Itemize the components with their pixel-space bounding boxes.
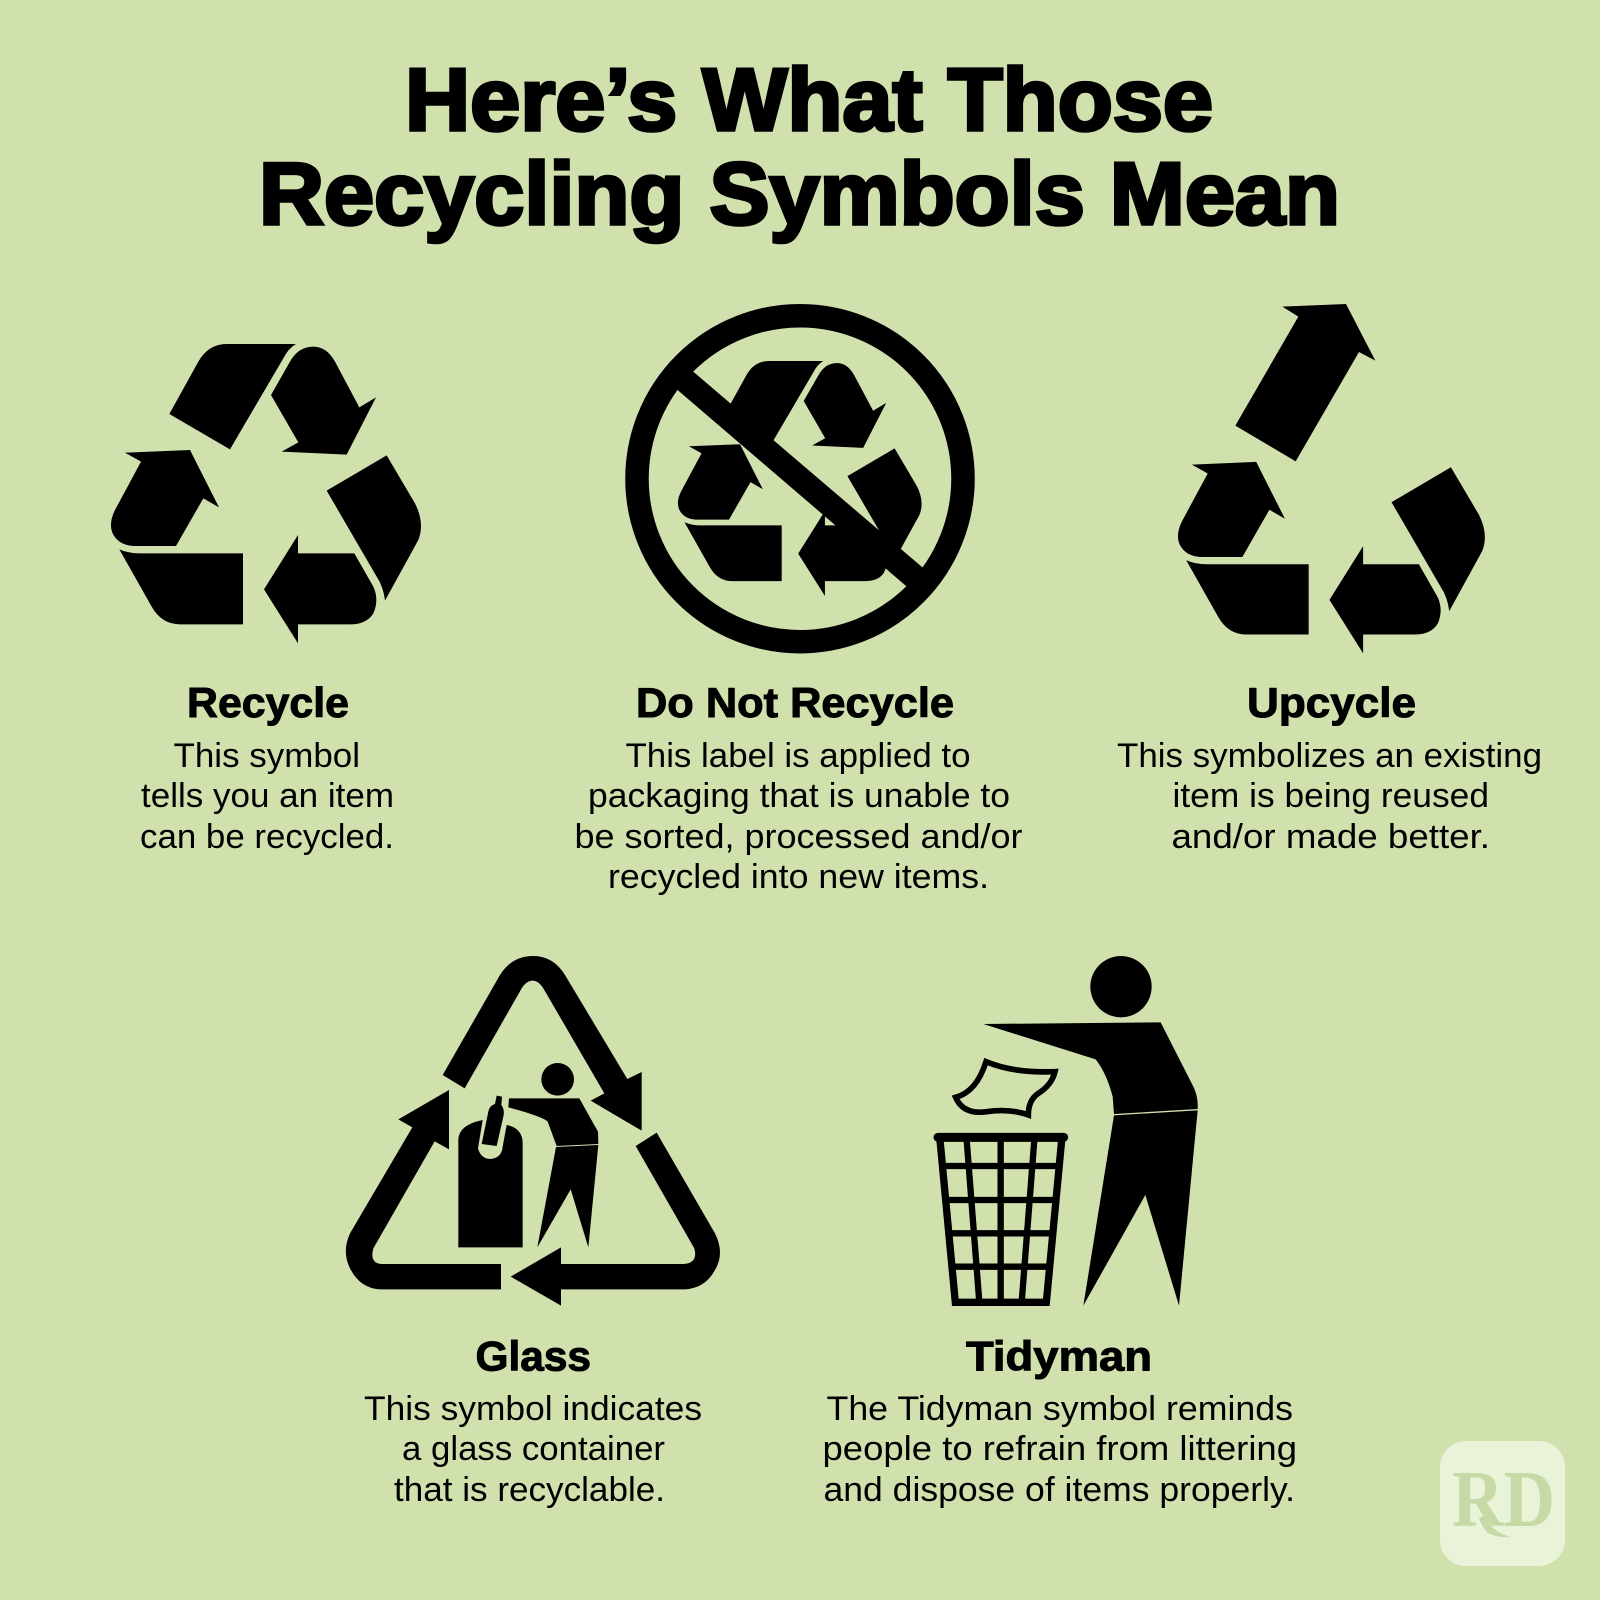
text: glass description (364, 1390, 702, 1509)
icon: tidyman symbol (938, 956, 1198, 1306)
heading: Do Not Recycle: Do Not Recycle (636, 679, 954, 726)
text: do not recycle description: This label is applied to (626, 737, 970, 775)
text: tidyman description (822, 1390, 1297, 1509)
title (259, 50, 1340, 243)
logo: RD badge: RD (1452, 1456, 1555, 1544)
panel: recycle (111, 344, 421, 856)
text: recycle description: can be recycled. (140, 818, 394, 856)
text: do not recycle description: recycled into new items. (608, 858, 989, 896)
text: do not recycle description (574, 737, 1022, 896)
icon: upcycle symbol (1178, 304, 1485, 653)
text: glass description: a glass container (402, 1430, 665, 1468)
icon: recycle symbol (111, 344, 421, 643)
logo: RD badge (1440, 1441, 1565, 1566)
heading: Glass: Glass (476, 1332, 591, 1380)
text: recycle description: tells you an item (141, 777, 394, 815)
text: upcycle description: and/or made better. (1172, 818, 1490, 856)
text: tidyman description: The Tidyman symbol reminds (826, 1390, 1293, 1428)
title: Recycling Symbols Mean (259, 144, 1340, 243)
text: do not recycle description: packaging that is unable to (588, 777, 1010, 815)
panel: do not recycle (574, 316, 1022, 896)
heading: Upcycle: Upcycle (1247, 679, 1416, 726)
heading: Recycle: Recycle (187, 679, 349, 726)
text: upcycle description (1117, 737, 1542, 856)
text: recycle description (140, 737, 394, 856)
text: upcycle description: item is being reused (1172, 777, 1489, 815)
heading: Tidyman: Tidyman (966, 1332, 1152, 1380)
panel: glass (346, 956, 720, 1509)
text: glass description: This symbol indicates (364, 1390, 702, 1428)
text: upcycle description: This symbolizes an existing (1117, 737, 1542, 775)
text: tidyman description: people to refrain from littering (822, 1430, 1297, 1468)
icon: glass symbol (346, 956, 720, 1306)
panel: tidyman (822, 956, 1297, 1509)
text: tidyman description: and dispose of items properly. (824, 1471, 1295, 1509)
text: glass description: that is recyclable. (394, 1471, 665, 1509)
text: recycle description: This symbol (174, 737, 360, 775)
panel: upcycle (1117, 304, 1542, 856)
text: do not recycle description: be sorted, processed and/or (574, 818, 1022, 856)
title: Here’s What Those (405, 50, 1213, 149)
icon: do not recycle symbol (637, 316, 963, 642)
